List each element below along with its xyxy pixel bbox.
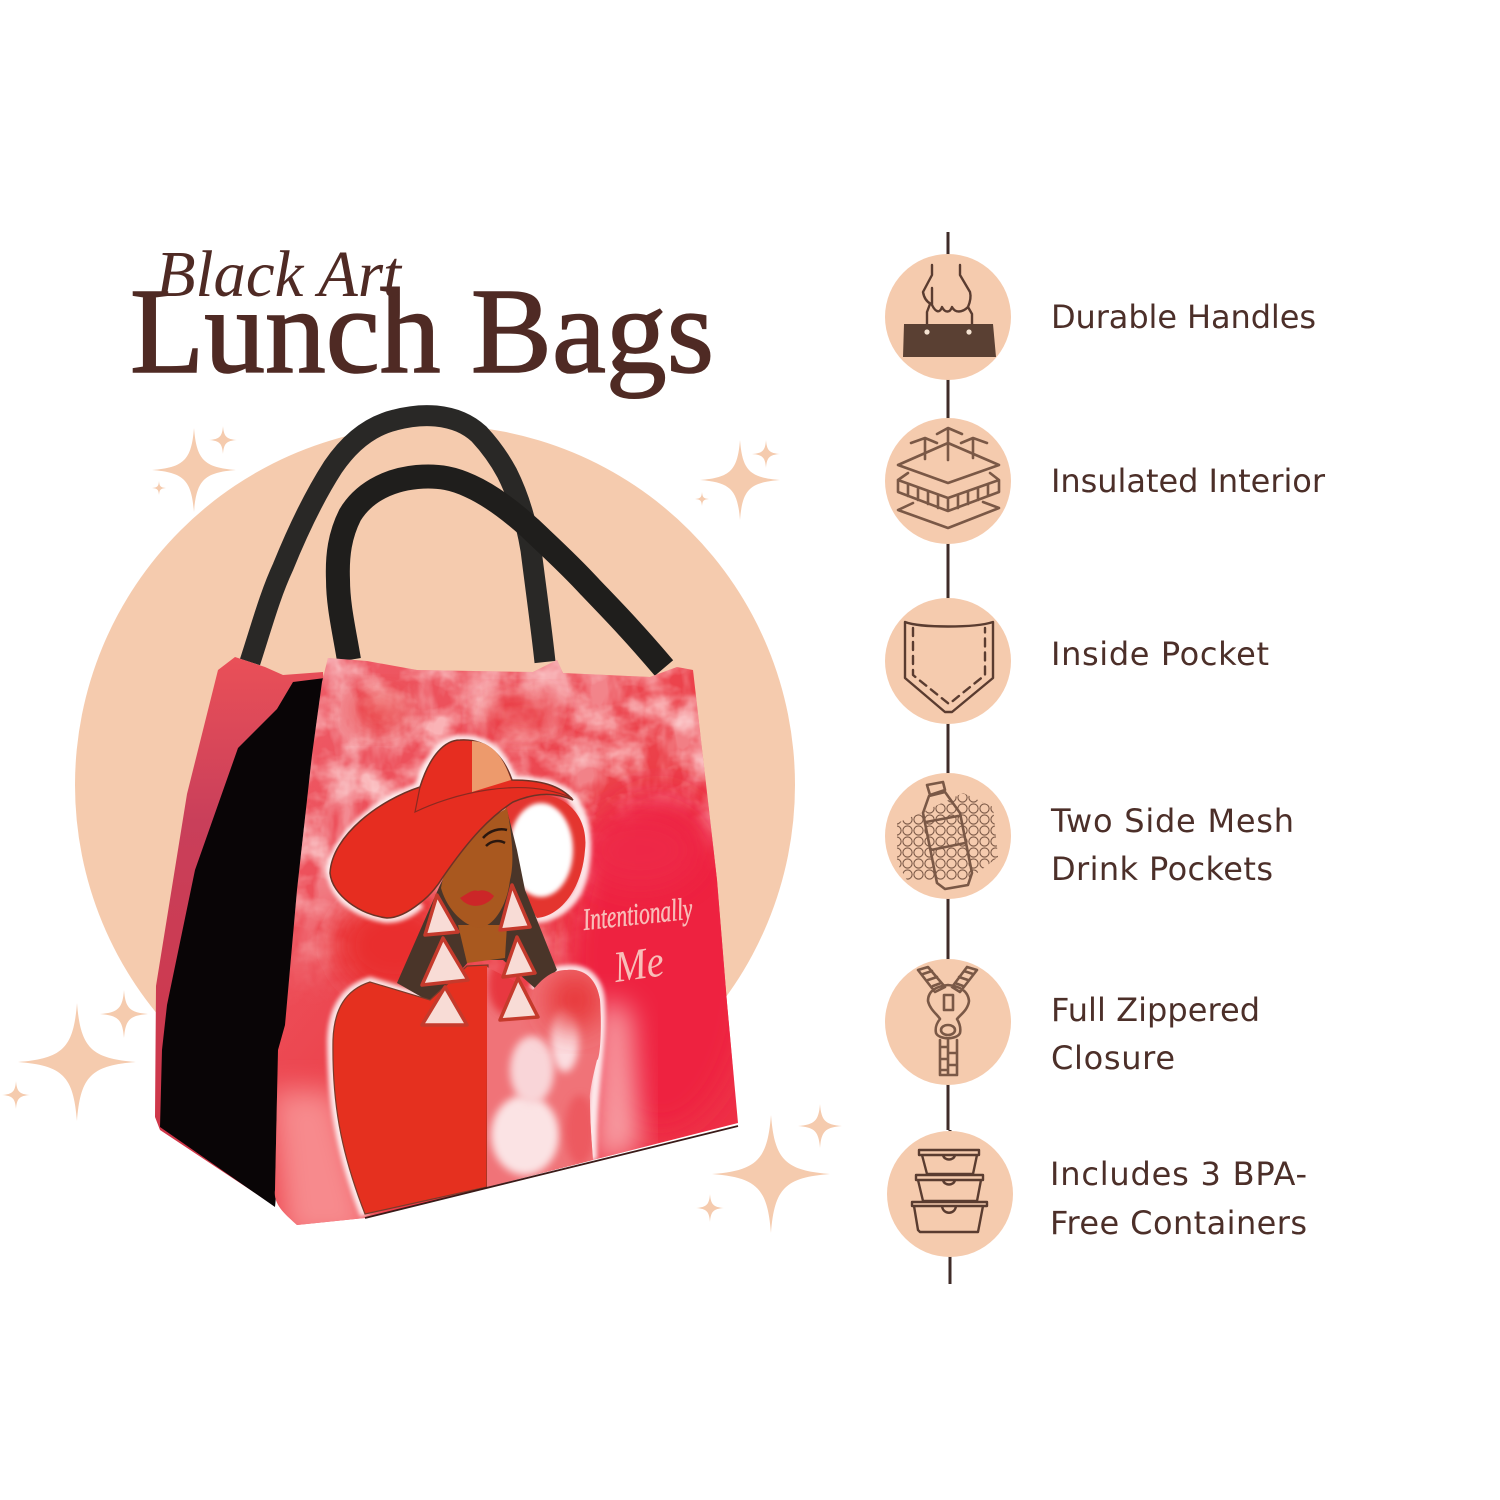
neck xyxy=(458,925,507,963)
label: Inside Pocket xyxy=(1051,635,1269,673)
left side panel xyxy=(155,657,330,1205)
moon xyxy=(505,795,585,918)
label: Full Zippered xyxy=(1051,991,1260,1029)
feature: inside pocket xyxy=(885,598,1269,724)
icon: bottle and mesh xyxy=(885,773,1011,899)
woman's hair xyxy=(397,810,557,1003)
icon: zipper xyxy=(885,959,1011,1085)
main heading: Lunch Bags xyxy=(130,264,714,399)
triangle earrings xyxy=(422,885,538,1025)
bag caption: Intentionally xyxy=(580,891,694,937)
feature: containers xyxy=(887,1131,1307,1257)
left dress half xyxy=(333,965,488,1214)
front panel xyxy=(270,650,750,1240)
background circle xyxy=(75,425,795,1145)
label: Includes 3 BPA- xyxy=(1050,1155,1307,1193)
eye and brow xyxy=(483,829,507,846)
front handle xyxy=(338,476,664,668)
figure halo xyxy=(332,740,600,1215)
red hat xyxy=(330,740,573,918)
lunch bag illustration xyxy=(155,416,750,1240)
feature: durable handles xyxy=(885,254,1316,380)
icon: stacked containers xyxy=(887,1131,1013,1257)
right dress half xyxy=(487,967,601,1187)
label: Durable Handles xyxy=(1051,298,1316,336)
title xyxy=(130,238,714,399)
feature: zipper closure: Closure xyxy=(1051,1039,1175,1077)
feature: mesh drink pockets xyxy=(885,773,1294,899)
timeline spine xyxy=(948,232,950,1284)
lunch bag illustration: Me xyxy=(610,936,667,992)
back handle xyxy=(250,416,545,662)
feature: insulated interior xyxy=(885,418,1326,544)
face xyxy=(441,808,512,928)
bag bottom edge xyxy=(365,1126,738,1218)
feature: containers: Free Containers xyxy=(1050,1204,1307,1242)
icon: pocket xyxy=(885,598,1011,724)
hat crown highlight xyxy=(472,741,511,792)
sparkles xyxy=(2,426,842,1233)
lips xyxy=(460,890,494,906)
feature: zipper closure xyxy=(885,959,1260,1085)
panel texture xyxy=(294,658,714,975)
script heading: Black Art xyxy=(156,238,403,311)
icon: hand carrying bag xyxy=(885,254,1011,380)
label: Two Side Mesh xyxy=(1050,802,1294,840)
black side interior xyxy=(160,678,325,1207)
icon: insulation layers xyxy=(885,418,1011,544)
label: Insulated Interior xyxy=(1051,462,1326,500)
feature: mesh drink pockets: Drink Pockets xyxy=(1051,850,1273,888)
